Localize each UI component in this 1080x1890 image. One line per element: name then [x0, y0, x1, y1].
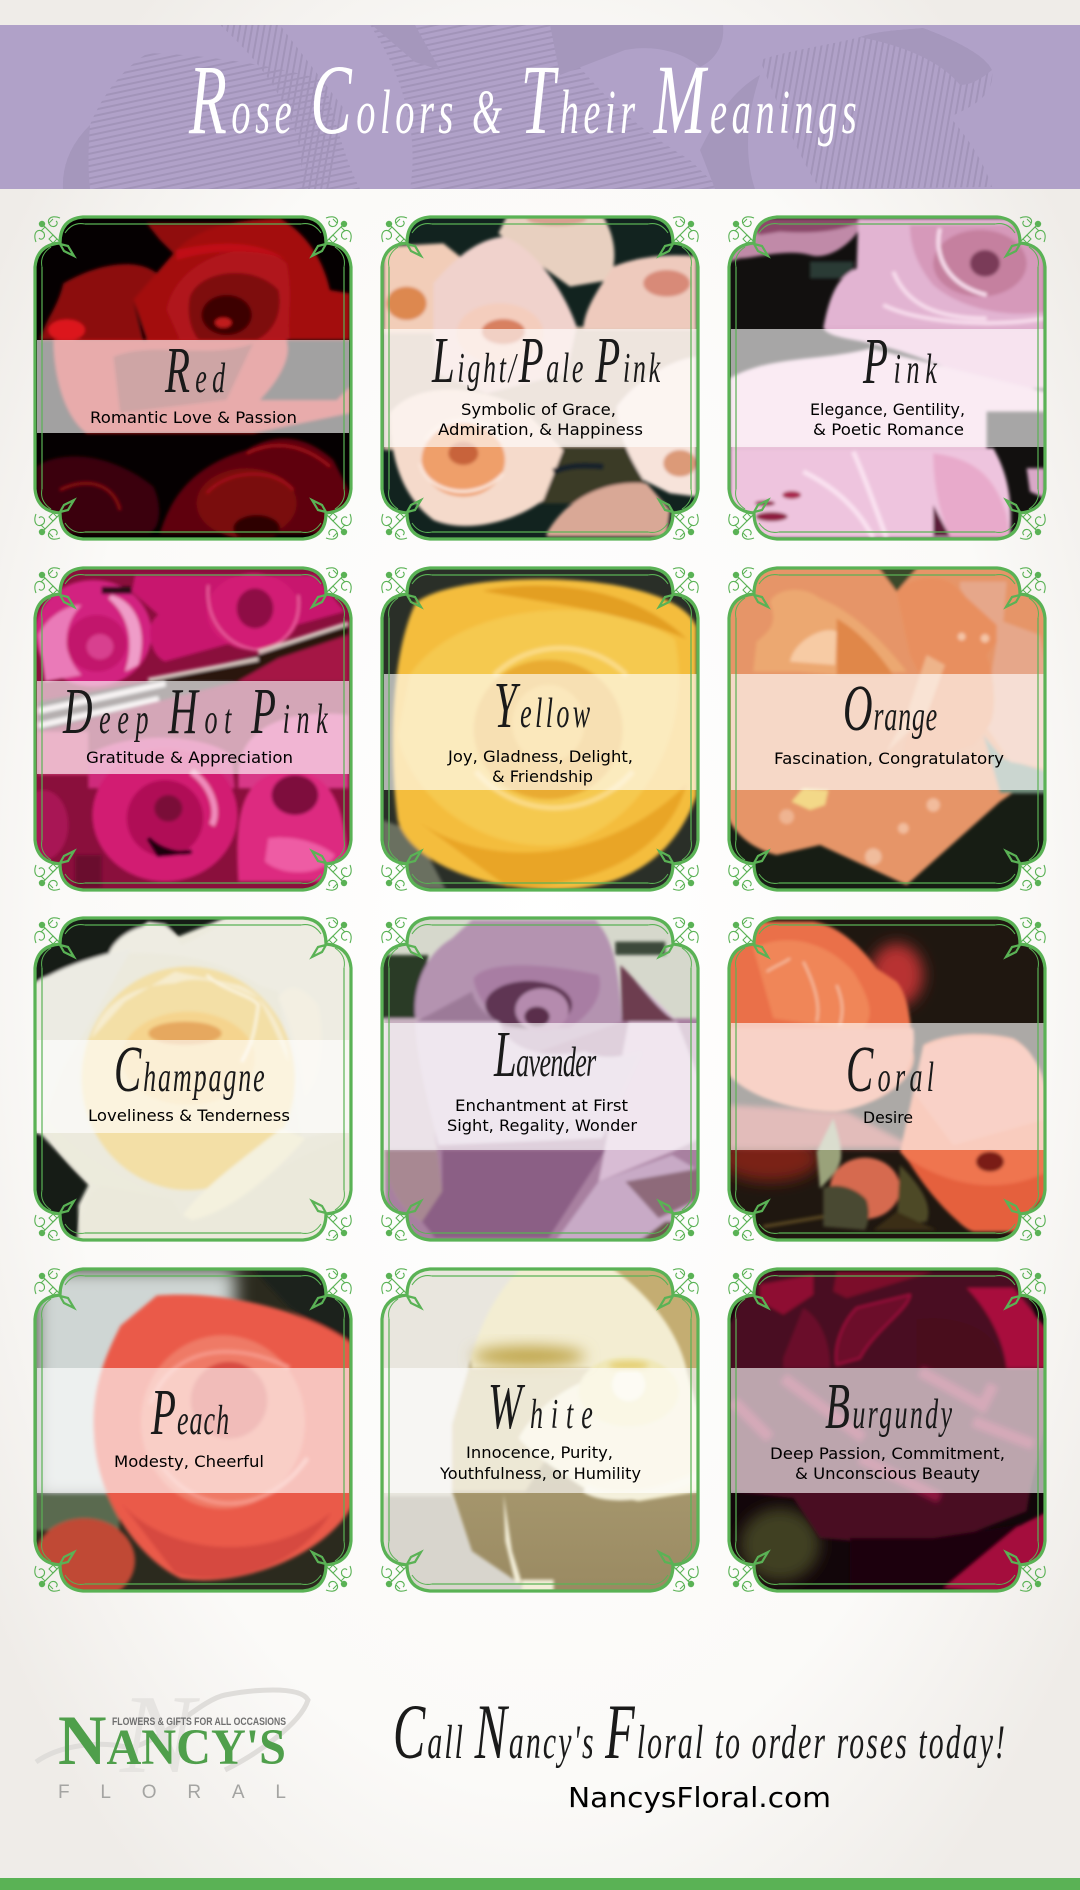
ornamental frame [729, 1269, 1045, 1591]
card: Deep Hot Pink [18, 568, 351, 890]
call to action: Call Nancy's Floral to order roses today! [393, 1689, 1005, 1776]
logo tagline: FLOWERS & GIFTS FOR ALL OCCASIONS [112, 1716, 286, 1728]
card: Light/Pale Pink [382, 211, 698, 539]
ornamental frame [35, 918, 351, 1240]
rose name: Burgundy [825, 1369, 952, 1442]
card: Peach [34, 1269, 352, 1603]
website: NancysFloral.com [568, 1781, 831, 1814]
photo: lavender rose [379, 918, 700, 1242]
text band [731, 674, 1044, 790]
meaning: Deep Passion, Commitment, [770, 1444, 1005, 1463]
text band [731, 1023, 1044, 1150]
meaning: Symbolic of Grace, [461, 400, 616, 419]
ornamental frame [35, 1269, 351, 1591]
bottom green bar [0, 1878, 1080, 1890]
ornamental frame [382, 217, 698, 539]
text band [37, 340, 349, 433]
rose name: Champagne [114, 1032, 265, 1105]
meaning: Gratitude & Appreciation [86, 748, 293, 767]
meaning: Romantic Love & Passion [90, 408, 297, 427]
meaning: Admiration, & Happiness [438, 420, 643, 439]
ornamental frame [729, 918, 1045, 1240]
meaning: Fascination, Congratulatory [774, 749, 1004, 768]
rose name: Coral [846, 1032, 934, 1105]
photo: champagne rose [32, 915, 353, 1242]
photo: pale pink roses [382, 211, 698, 539]
card: Yellow [382, 568, 698, 890]
ornamental frame [729, 568, 1045, 890]
card: Orange [727, 565, 1048, 890]
card: Burgundy [729, 1269, 1048, 1595]
meaning: Sight, Regality, Wonder [447, 1116, 637, 1135]
rose name: Orange [843, 671, 937, 744]
card: White [382, 1268, 702, 1595]
ornamental frame [35, 568, 351, 890]
text band [731, 329, 1044, 447]
meaning: Loveliness & Tenderness [88, 1106, 290, 1125]
title: Rose Colors & Their Meanings [188, 44, 857, 155]
meaning: Desire [863, 1108, 913, 1127]
logo wordmark: NANCY'S [58, 1702, 286, 1780]
logo subtitle: FLORAL [58, 1782, 286, 1803]
meaning: Youthfulness, or Humility [439, 1464, 641, 1483]
meaning: Joy, Gladness, Delight, [447, 747, 633, 766]
text band [37, 1040, 349, 1133]
text band [37, 1368, 349, 1493]
rose name: Red [164, 333, 226, 406]
card: Red [35, 217, 351, 542]
photo: peach rose [34, 1269, 352, 1603]
meaning: Innocence, Purity, [466, 1443, 613, 1462]
card: Lavender [379, 918, 700, 1242]
text band [731, 1368, 1044, 1493]
photo: burgundy rose [729, 1269, 1048, 1595]
ornamental frame [382, 568, 698, 890]
meaning: Enchantment at First [455, 1096, 628, 1115]
text band [384, 1023, 697, 1150]
rose name: Light/Pale Pink [431, 323, 661, 396]
engraved rose illustration [63, 25, 992, 189]
photo: yellow rose [382, 568, 698, 890]
rose name: White [488, 1369, 593, 1442]
text band [384, 329, 697, 447]
ornamental frame [729, 217, 1045, 539]
logo watermark initial: N [119, 1673, 200, 1797]
rose name: Peach [150, 1375, 229, 1448]
ornamental frame [382, 1269, 698, 1591]
photo: pink roses [729, 217, 1045, 539]
rose name: Pink [862, 324, 938, 397]
ornamental frame [382, 918, 698, 1240]
meaning: Elegance, Gentility, [810, 400, 965, 419]
photo: red roses [35, 217, 351, 542]
card: Champagne [32, 915, 353, 1242]
rose name: Lavender [493, 1017, 597, 1090]
rose name: Yellow [494, 668, 591, 741]
photo: coral roses [720, 918, 1048, 1240]
meaning: Modesty, Cheerful [114, 1452, 264, 1471]
text band [384, 1368, 697, 1493]
header banner [0, 25, 1080, 189]
logo: Nancy's Floral [36, 1673, 308, 1803]
meaning: & Poetic Romance [813, 420, 964, 439]
card: Coral [720, 918, 1048, 1240]
text band [384, 674, 697, 790]
meaning: & Friendship [492, 767, 593, 786]
card: Pink [729, 217, 1045, 539]
ornamental frame [35, 217, 351, 539]
photo: deep hot pink roses [18, 568, 351, 890]
text band [37, 681, 349, 774]
meaning: & Unconscious Beauty [795, 1464, 980, 1483]
photo: white rose [382, 1268, 702, 1595]
rose name: Deep Hot Pink [62, 674, 329, 747]
photo: orange rose [727, 565, 1048, 890]
logo watermark swash [36, 1690, 308, 1770]
